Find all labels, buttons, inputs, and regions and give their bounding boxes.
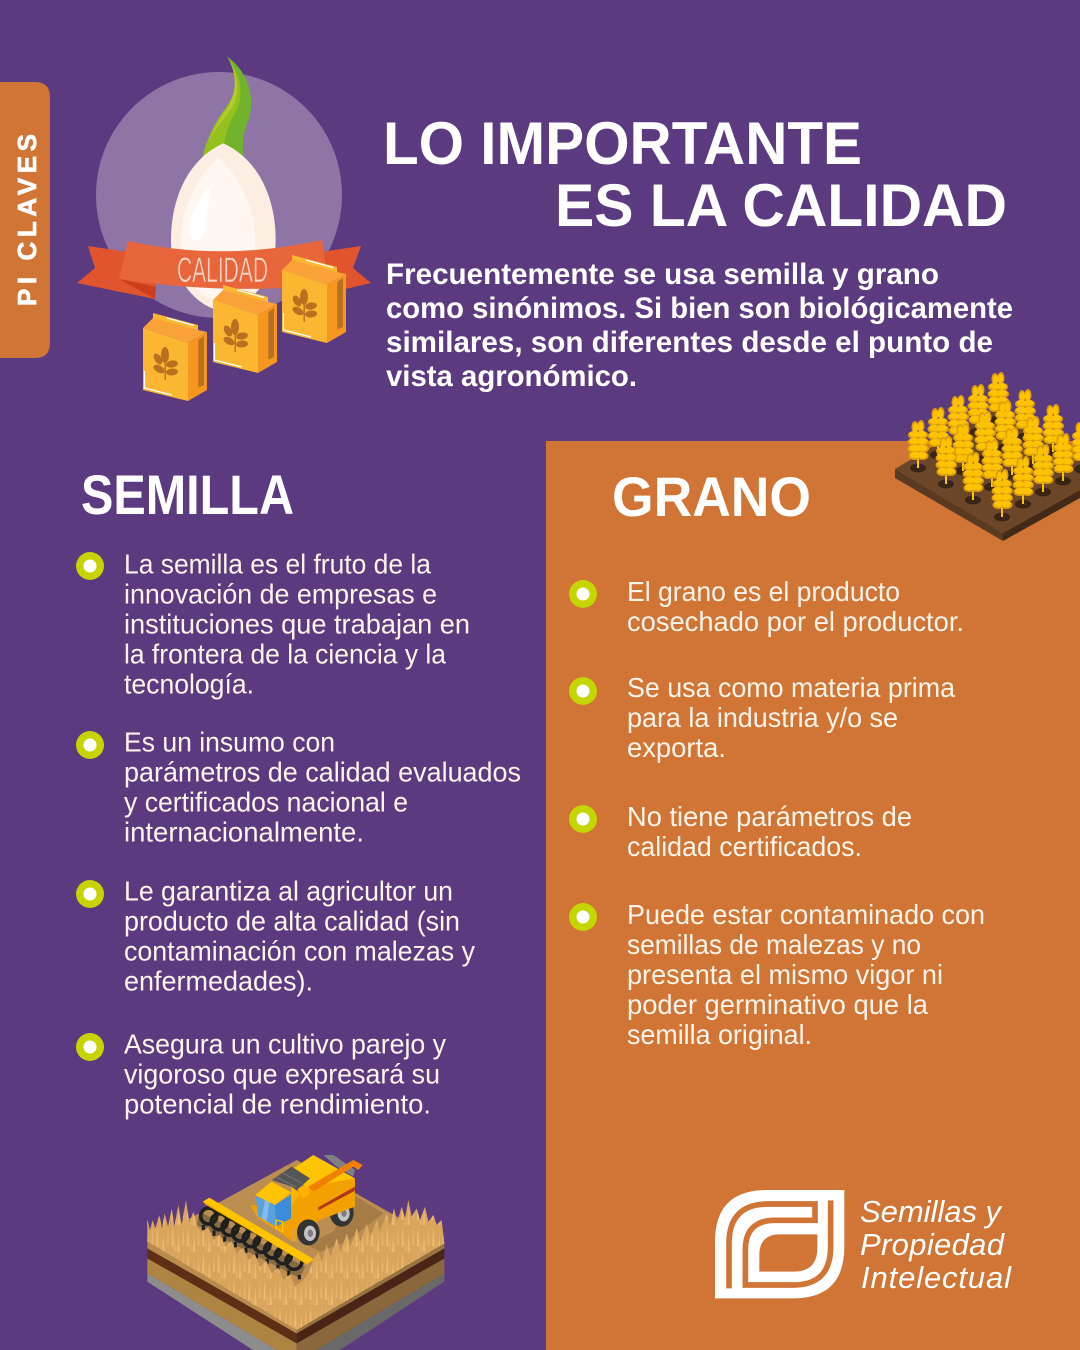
item: grano 3: calidad certificados. [627, 831, 862, 862]
logo wordmark: Propiedad [860, 1227, 1006, 1262]
item: grano 2 [569, 672, 956, 763]
illustration: seed with quality ribbon and bags [77, 57, 371, 401]
icon: seed bag middle [213, 285, 277, 373]
item: semilla 1 [76, 548, 470, 699]
list: semilla [76, 548, 521, 1119]
icon: seed bag right [282, 255, 346, 343]
item: grano 2: para la industria y/o se [627, 702, 898, 733]
list: grano [569, 576, 985, 1050]
item: semilla 1: instituciones que trabajan en [124, 608, 470, 639]
item: grano 1 [569, 576, 964, 637]
title: LO IMPORTANTE [383, 110, 862, 177]
item: grano 4: Puede estar contaminado con [627, 899, 985, 930]
item: semilla 3: Le garantiza al agricultor un [124, 875, 453, 906]
item: semilla 1: La semilla es el fruto de la [124, 548, 432, 579]
title [383, 110, 1007, 239]
panel: grano [546, 441, 1080, 1350]
item: semilla 1: innovación de empresas e [124, 578, 437, 609]
item: grano 4 [569, 899, 985, 1050]
logo: Semillas y Propiedad Intelectual [715, 1190, 1012, 1298]
heading: semilla: SEMILLA [81, 463, 294, 526]
soil block [147, 1160, 444, 1350]
item: grano 3 [569, 801, 912, 862]
item: semilla 2: y certificados nacional e [124, 786, 408, 817]
logo mark [715, 1190, 844, 1298]
title: ES LA CALIDAD [555, 172, 1007, 239]
item: semilla 3: enfermedades). [124, 965, 313, 996]
item: grano 1: cosechado por el productor. [627, 606, 964, 637]
item: semilla 2: Es un insumo con [124, 726, 335, 757]
logo wordmark [860, 1194, 1012, 1295]
item: semilla 2: internacionalmente. [124, 816, 364, 847]
intro paragraph: vista agronómico. [386, 360, 637, 393]
item: semilla 4: Asegura un cultivo parejo y [124, 1028, 446, 1059]
heading: grano: GRANO [612, 465, 811, 528]
seed backdrop circle [96, 72, 342, 318]
intro paragraph: como sinónimos. Si bien son biológicamente [386, 292, 1013, 325]
item: grano 2: Se usa como materia prima [627, 672, 956, 703]
item: semilla 2: parámetros de calidad evaluados [124, 756, 521, 787]
logo wordmark: Intelectual [861, 1260, 1012, 1295]
logo wordmark: Semillas y [860, 1194, 1004, 1229]
side tab: PI claves [0, 82, 50, 358]
item: grano 3: No tiene parámetros de [627, 801, 912, 832]
side tab: PI claves: PI CLAVES [12, 134, 42, 306]
item: grano 2: exporta. [627, 732, 726, 763]
item: grano 4: presenta el mismo vigor ni [627, 959, 943, 990]
item: semilla 2 [76, 726, 521, 847]
intro paragraph: similares, son diferentes desde el punto de [386, 326, 993, 359]
illustration: combine harvester in wheat field [147, 1155, 444, 1350]
illustration: wheat tray [895, 372, 1080, 541]
harvester [250, 1155, 363, 1245]
item: semilla 3 [76, 875, 475, 996]
icon: sprouting seed [171, 57, 276, 311]
icon: seed bag left [143, 313, 207, 401]
intro paragraph: Frecuentemente se usa semilla y grano [386, 258, 939, 291]
wheat field [147, 1200, 444, 1330]
item: grano 4: semilla original. [627, 1019, 812, 1050]
item: grano 1: El grano es el producto [627, 576, 900, 607]
ribbon: CALIDAD [177, 251, 268, 290]
item: grano 4: semillas de malezas y no [627, 929, 921, 960]
item: semilla 3: contaminación con malezas y [124, 935, 475, 966]
header reel [197, 1198, 314, 1279]
item: semilla 4: potencial de rendimiento. [124, 1088, 431, 1119]
ribbon [77, 240, 371, 299]
item: grano 4: poder germinativo que la [627, 989, 929, 1020]
item: semilla 3: producto de alta calidad (sin [124, 905, 460, 936]
item: semilla 1: tecnología. [124, 668, 254, 699]
item: semilla 1: la frontera de la ciencia y la [124, 638, 447, 669]
item: semilla 4 [76, 1028, 446, 1119]
intro paragraph [386, 258, 1013, 393]
item: semilla 4: vigoroso que expresará su [124, 1058, 440, 1089]
